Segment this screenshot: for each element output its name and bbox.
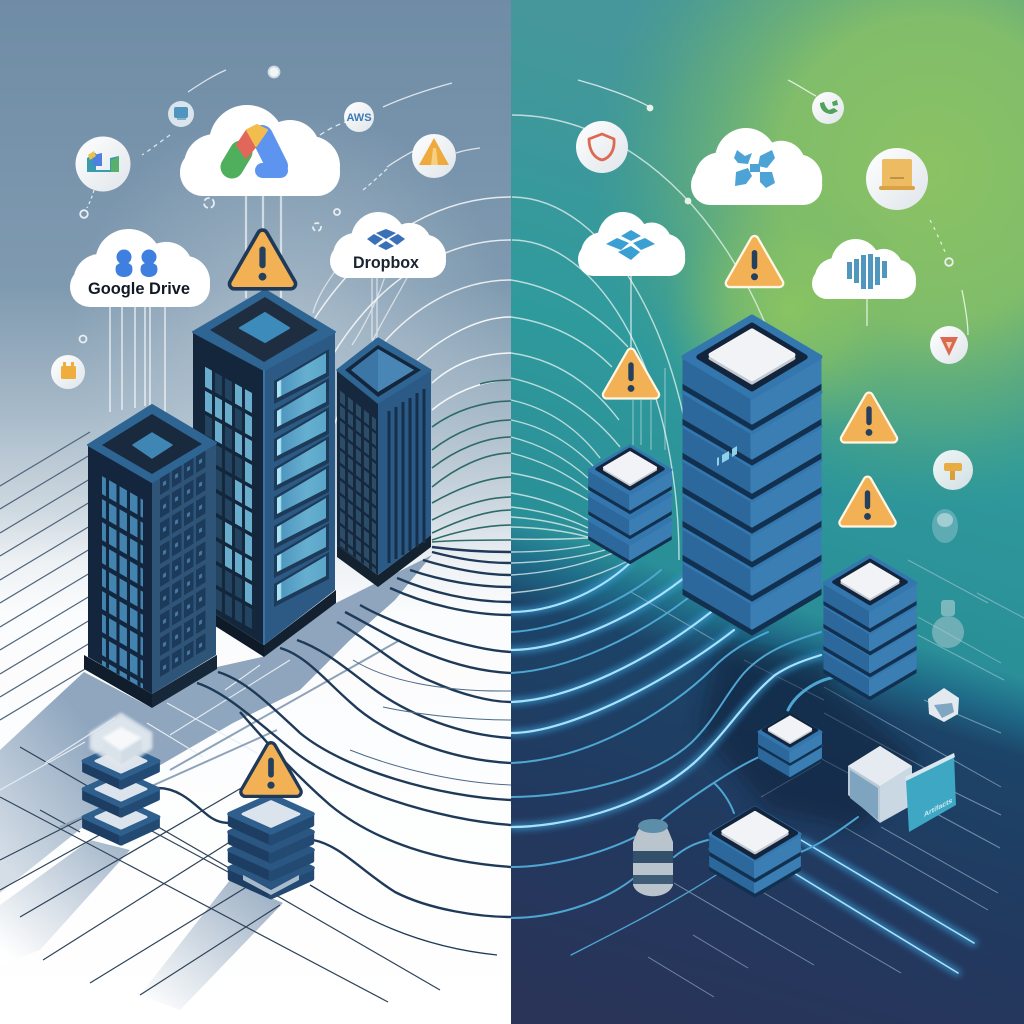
cloud: Dropbox: [330, 212, 446, 278]
concentric signal arcs: right panel: [510, 114, 766, 594]
floor shadow: right panel: [700, 640, 920, 830]
icon: ring nodes left: [80, 66, 340, 342]
icon: orange triangle badge: [412, 134, 456, 178]
warning icon on central tower: [234, 235, 291, 284]
cloud: diamonds: [578, 212, 685, 276]
icon: yellow box badge: [866, 148, 928, 210]
server stack: small: [759, 714, 821, 779]
icon: red shield badge: [930, 326, 968, 364]
floor grid: left panel: [0, 432, 440, 1002]
lines under Dropbox cloud: [313, 270, 408, 345]
lines under right clouds: [631, 274, 867, 450]
icon: shield badge: [576, 121, 628, 173]
warning icon: right lower: [843, 480, 892, 523]
warning icon: right middle: [845, 396, 893, 439]
teal panel: Artifacts: [924, 796, 952, 819]
icon: sound bars: [847, 254, 887, 289]
icon: ring nodes right: [648, 106, 953, 266]
server bars: [274, 349, 329, 607]
data cables: right panel: [511, 563, 974, 973]
server stack: medium right: [824, 556, 916, 699]
server stack: bottom: [710, 808, 800, 897]
icon: AWS badge: AWS: [346, 112, 372, 124]
tower: front left: [84, 405, 217, 708]
icon: Google Ads logo: [232, 125, 288, 178]
label: Dropbox: [353, 254, 420, 272]
concentric signal arcs: left panel: [314, 196, 511, 543]
cloud: bars: [812, 239, 916, 299]
server stack: large centre right: [684, 317, 820, 634]
exposed drive strip: [243, 875, 299, 895]
cloud: swirl: [691, 128, 822, 205]
cloud: Google Drive: [70, 229, 210, 307]
icon: AWS badge: [344, 102, 374, 132]
tower: back centre with server bars: [193, 290, 336, 657]
glass orb icons: [932, 509, 964, 648]
database cylinder: [633, 819, 673, 896]
icon: Drive blobs: [116, 250, 157, 277]
icon: monitor badge: [168, 101, 194, 127]
floor grid: right panel: [631, 560, 1024, 997]
glass cube: [91, 714, 151, 768]
label: Google Drive: [88, 280, 190, 298]
icon: blue fragments: [734, 150, 775, 188]
icon: blue diamonds: [606, 230, 655, 260]
server stack: warning left: [230, 796, 312, 897]
background: right panel: [511, 0, 1024, 1024]
icon: yellow puzzle badge: [51, 355, 85, 389]
status lights: [717, 446, 737, 466]
glass cube with teal panel: [848, 746, 956, 832]
connector lines to the top icons: [87, 70, 968, 335]
warning icon: right upper: [730, 240, 779, 283]
small glass cube: [928, 688, 959, 722]
lines under Google Ads cloud: [246, 194, 281, 298]
icon: green phone badge: [812, 92, 844, 124]
warning icon: right left: [607, 352, 655, 395]
server stack: medium left: [589, 446, 671, 563]
server stack: glass cube left: [84, 714, 158, 844]
icon: Dropbox diamonds: [367, 229, 405, 250]
cloud: Google Ads: [180, 105, 340, 196]
warning icon on lower left stack: [245, 747, 297, 792]
data cables: left panel: [158, 547, 511, 955]
lines under Google Drive cloud: [110, 305, 165, 412]
icon: coloured workspace badge: [76, 136, 130, 192]
floor shadows: left panel: [0, 555, 432, 1010]
icon: yellow plug badge: [933, 450, 973, 490]
tower: back right: [337, 338, 431, 587]
background: left panel: [0, 0, 512, 1024]
left face windows: [205, 367, 255, 635]
